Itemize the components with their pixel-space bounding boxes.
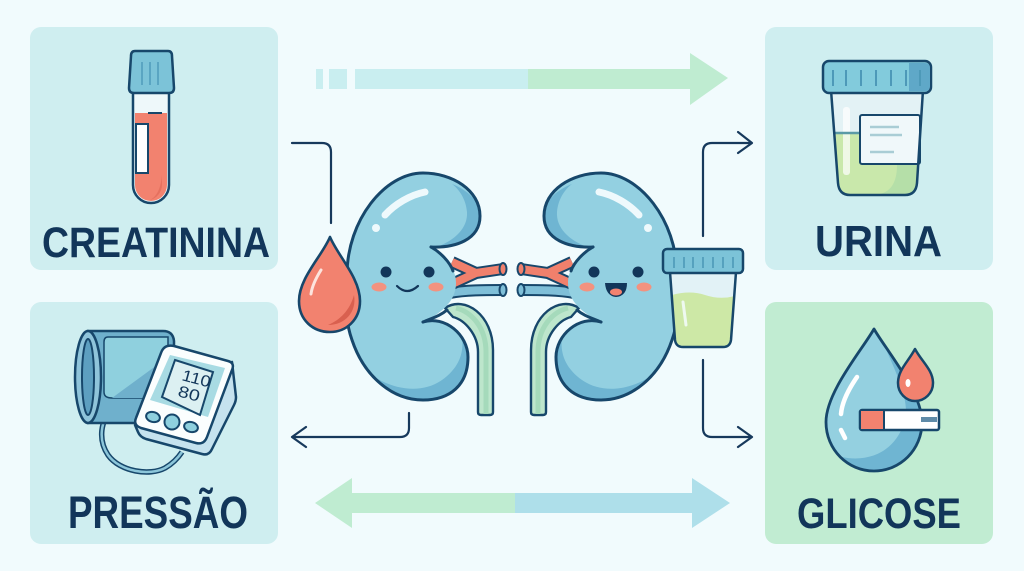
- panel: glicose: [765, 302, 993, 544]
- connector: to glicose: [703, 360, 752, 447]
- icon: blood drop: [299, 237, 360, 332]
- icon: blood pressure monitor: 80: [176, 383, 202, 406]
- icon: glucose drop and test strip: [826, 329, 939, 471]
- face: right kidney: [580, 266, 652, 297]
- face: left kidney: [372, 266, 444, 292]
- arrow: top flow: [316, 53, 728, 105]
- connector: to urina: [703, 132, 752, 236]
- panel: pressão: [30, 302, 278, 544]
- icon: blood pressure monitor: 110: [180, 367, 212, 391]
- label: glicose: GLICOSE: [797, 490, 961, 538]
- panel: urina: [765, 27, 993, 270]
- connector: creatinina to drop: [292, 143, 331, 223]
- right kidney: [518, 173, 678, 415]
- icon: small urine cup: [663, 249, 743, 347]
- label: pressão: PRESSÃO: [68, 487, 248, 538]
- icon: blood pressure monitor: [75, 331, 236, 472]
- connector: to pressão: [292, 413, 409, 447]
- label: creatinina: CREATININA: [42, 219, 270, 267]
- left kidney: [346, 173, 506, 415]
- icon: urine sample cup: [823, 61, 931, 195]
- panel: creatinina: [30, 27, 278, 270]
- icon: test tube: [129, 51, 174, 203]
- label: urina: URINA: [815, 217, 942, 266]
- arrow: bottom two-way flow: [315, 478, 730, 528]
